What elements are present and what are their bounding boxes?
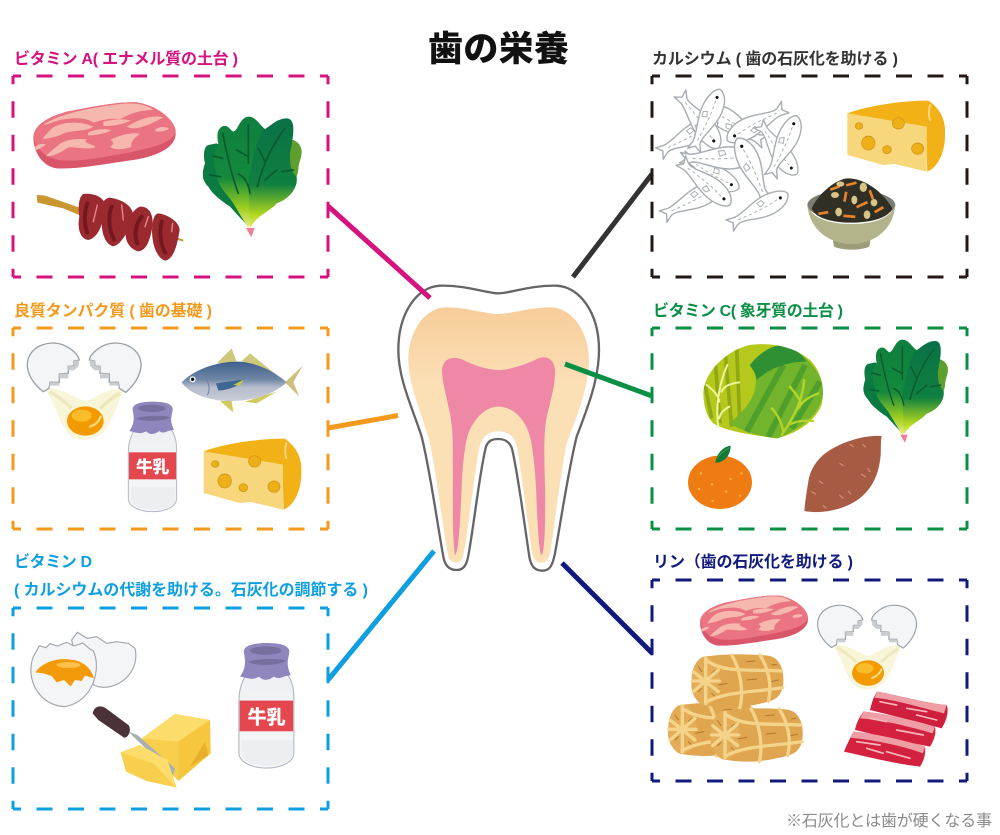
icon: milk bottle <box>128 402 177 512</box>
panel: vitamin A <box>13 49 328 277</box>
icon: leafy greens <box>863 340 948 443</box>
icon: cracked egg <box>818 605 916 689</box>
icon: butter and knife <box>93 706 211 788</box>
icon: fish <box>182 348 303 412</box>
icon: cabbage <box>703 344 823 439</box>
pulp <box>442 357 555 555</box>
panel: calcium <box>652 49 967 277</box>
heading: protein: 良質タンパク質 ( 歯の基礎 ) <box>14 301 212 320</box>
title: 歯の栄養 <box>428 30 569 69</box>
icon: milk bottle: 牛乳 <box>136 456 170 476</box>
icon: broken egg with yolk <box>31 632 136 707</box>
dentin <box>408 307 589 563</box>
icon: marbled meat <box>700 595 808 646</box>
connector: calcium <box>573 174 652 277</box>
icon: sweet potato <box>804 436 882 512</box>
heading: vitamin A: ビタミン A( エナメル質の土台 ) <box>14 49 238 68</box>
icon: sliced beef <box>844 692 948 767</box>
dashed frame <box>652 580 967 781</box>
icon: leafy greens <box>203 117 302 237</box>
connector: vitamin D <box>328 551 434 680</box>
dashed frame <box>13 328 328 529</box>
panel: phosphorus <box>652 552 967 781</box>
dashed frame <box>13 608 328 809</box>
heading: calcium: カルシウム ( 歯の石灰化を助ける ) <box>652 49 898 68</box>
dashed frame <box>652 76 967 277</box>
connector: vitamin C to dentin <box>565 364 652 396</box>
icon: cheese <box>847 101 945 172</box>
panel: vitamin C <box>652 301 967 529</box>
icon: cheese <box>204 439 301 510</box>
icon: liver skewer <box>37 194 183 261</box>
connector: protein <box>328 416 398 428</box>
icon: cracked egg <box>27 343 141 440</box>
heading: phosphorus: リン（歯の石灰化を助ける ) <box>653 552 853 571</box>
panel: vitamin D <box>13 552 368 809</box>
icon: mandarin orange <box>688 446 752 509</box>
icon: marbled meat <box>33 102 176 168</box>
tooth diagram <box>398 286 599 571</box>
footnote: ※石灰化とは歯が硬くなる事 <box>786 812 992 830</box>
connector: phosphorus <box>562 563 652 653</box>
dashed frame <box>13 76 328 277</box>
icon: hijiki bowl <box>807 178 895 250</box>
icon: dried sardines <box>654 86 807 235</box>
panel: protein <box>13 301 328 529</box>
tooth outline <box>398 286 599 571</box>
icon: milk bottle: 牛乳 <box>248 706 286 728</box>
heading: vitamin C: ビタミン C( 象牙質の土台 ) <box>653 301 843 320</box>
dashed frame <box>652 328 967 529</box>
icon: milk bottle <box>239 643 294 768</box>
heading: vitamin D description: ( カルシウムの代謝を助ける。石灰化の調節する ) <box>14 580 368 599</box>
icon: rice bales <box>668 654 803 762</box>
heading: vitamin D title: ビタミン D <box>14 552 92 571</box>
connector: vitamin A to enamel <box>328 206 430 298</box>
